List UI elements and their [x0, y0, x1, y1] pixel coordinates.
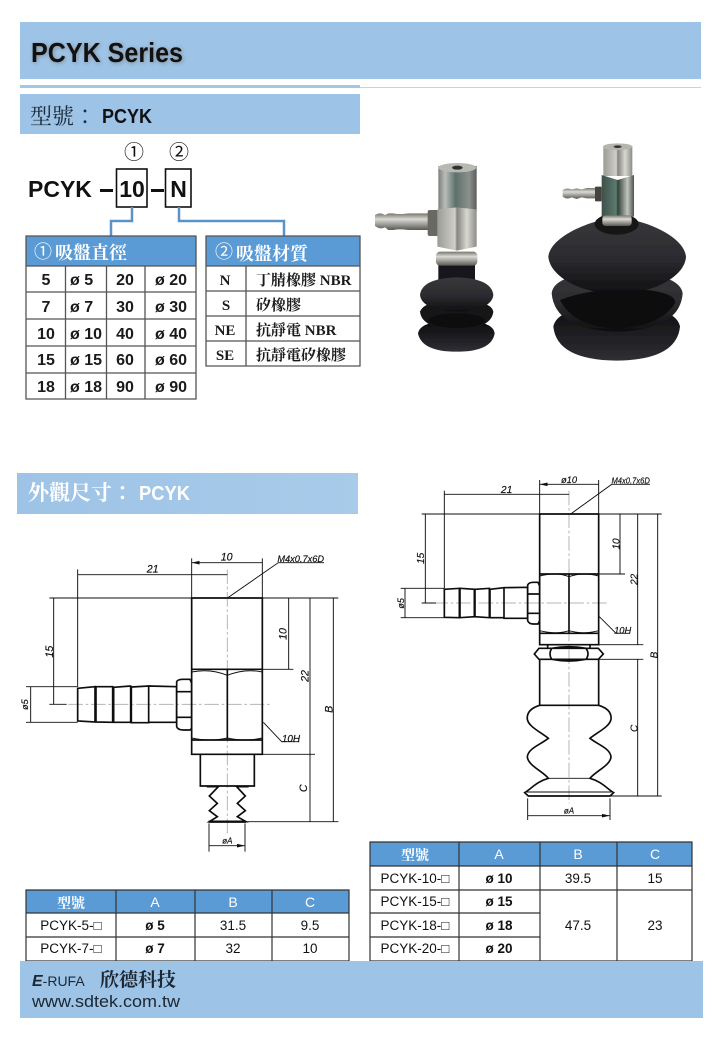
dimension labels: ø5	[20, 698, 30, 710]
dimension labels: M4x0.7x6D	[611, 476, 650, 486]
table: right dimensions: ø 10	[485, 871, 513, 886]
model code diagram	[28, 136, 284, 236]
table: right dimensions: PCYK-10-□	[381, 871, 449, 886]
technical drawing: small model PCYK-5/7	[20, 551, 338, 852]
dimension labels: M4x0.7x6D	[277, 554, 325, 564]
dimension labels: C	[630, 724, 641, 732]
table: suction cup diameter	[26, 236, 196, 399]
table: left dimensions: 9.5	[301, 918, 319, 933]
table: left dimensions: C	[305, 894, 315, 910]
table: right dimensions: 47.5	[565, 918, 591, 933]
table: cup material: S	[222, 298, 230, 314]
dimension labels: 21	[500, 485, 512, 496]
table: right dimensions: B	[573, 846, 583, 862]
table: suction cup diameter: 90	[116, 379, 134, 396]
footer banner: company: 欣德科技	[100, 969, 176, 991]
table: left dimensions: B	[228, 894, 238, 910]
table: left dimensions: 型號	[57, 895, 85, 912]
table: cup material: 丁腈橡膠 NBR	[256, 271, 352, 289]
table: cup material: NE	[215, 323, 235, 339]
table: suction cup diameter: 30	[116, 299, 134, 316]
table: left dimensions: ø 7	[145, 941, 165, 956]
table: suction cup diameter: 20	[116, 272, 134, 289]
table: suction cup diameter: ø 60	[155, 352, 187, 369]
dimension labels: 22	[299, 670, 311, 683]
table: cup material: N	[220, 273, 231, 289]
table: suction cup diameter: ø 20	[155, 272, 187, 289]
section heading: outline dimensions: PCYK	[139, 483, 191, 505]
dimension labels: 15	[44, 646, 56, 658]
table: right dimensions: 39.5	[565, 871, 591, 886]
dimension labels: 10H	[614, 625, 631, 635]
table: left dimensions: A	[150, 894, 160, 910]
table: left dimensions: 31.5	[220, 918, 246, 933]
table: suction cup diameter: ø 90	[155, 379, 187, 396]
dimension labels: 10	[611, 538, 622, 550]
table: cup material: 抗靜電矽橡膠	[256, 346, 346, 364]
dimension labels: 10H	[282, 734, 301, 745]
photo: small vacuum cup with fitting	[375, 163, 495, 352]
table: right dimensions: C	[650, 846, 660, 862]
model code diagram: PCYK	[28, 176, 92, 202]
table: right dimensions	[370, 842, 692, 961]
table: left dimensions	[26, 890, 349, 961]
section heading: model number	[20, 94, 360, 134]
table: suction cup diameter: ø 30	[155, 299, 187, 316]
table: suction cup diameter: ø 5	[70, 272, 93, 289]
table: suction cup diameter: ø 18	[70, 379, 102, 396]
dimension labels: ø10	[561, 475, 578, 485]
footer banner: company: www.sdtek.com.tw	[31, 993, 180, 1011]
table: cup material: 抗靜電 NBR	[256, 321, 337, 339]
dimension labels: ø5	[396, 597, 406, 609]
dimension labels: 21	[146, 564, 159, 576]
table: suction cup diameter: 7	[42, 299, 51, 316]
table: right dimensions: A	[494, 846, 504, 862]
table: cup material: 矽橡膠	[256, 296, 301, 314]
model code diagram: ①	[124, 136, 144, 165]
table: cup material: ②	[215, 238, 233, 264]
table: right dimensions: ø 15	[485, 894, 513, 909]
table: suction cup diameter: 吸盤直徑	[55, 243, 127, 263]
table: suction cup diameter: 40	[116, 326, 134, 343]
table: left dimensions: PCYK-5-□	[40, 918, 102, 933]
table: left dimensions: 10	[302, 941, 318, 956]
section heading: outline dimensions: 外觀尺寸：	[28, 481, 133, 505]
table: right dimensions: PCYK-20-□	[381, 941, 449, 956]
table: right dimensions: ø 20	[485, 941, 513, 956]
table: suction cup diameter: 60	[116, 352, 134, 369]
dimension labels: 10	[278, 628, 290, 640]
table: right dimensions: 15	[647, 871, 663, 886]
table: left dimensions: ø 5	[145, 918, 165, 933]
model code diagram: N	[170, 176, 187, 202]
table: suction cup diameter: 10	[37, 326, 55, 343]
title banner: PCYK Series	[20, 22, 701, 79]
table: cup material	[206, 236, 360, 366]
section heading: outline dimensions	[17, 473, 358, 514]
table: right dimensions: 型號	[401, 847, 429, 864]
dimension labels: 22	[629, 573, 640, 586]
table: suction cup diameter: ø 40	[155, 326, 187, 343]
dimension labels: 15	[416, 552, 427, 564]
dimension labels: øA	[222, 836, 232, 845]
table: left dimensions: 32	[225, 941, 241, 956]
dimension labels: B	[323, 706, 335, 713]
table: right dimensions: PCYK-18-□	[381, 918, 449, 933]
title banner: PCYK Series: PCYK Series	[31, 37, 183, 68]
footer banner: company	[20, 961, 703, 1018]
dimension labels: B	[649, 651, 660, 658]
model code diagram: 10	[119, 176, 145, 202]
section heading: model number: PCYK	[102, 106, 152, 128]
table: suction cup diameter: ø 15	[70, 352, 102, 369]
table: right dimensions: PCYK-15-□	[381, 894, 449, 909]
table: suction cup diameter: ø 10	[70, 326, 102, 343]
table: suction cup diameter: ø 7	[70, 299, 93, 316]
dimension labels	[396, 475, 660, 816]
dimension labels: C	[298, 784, 310, 792]
dimension labels: 10	[221, 551, 233, 563]
table: suction cup diameter: ①	[34, 238, 52, 264]
photo: large vacuum cup with fitting	[548, 143, 686, 361]
table: cup material: 吸盤材質	[236, 244, 310, 264]
footer banner: company: E-RUFA	[32, 973, 85, 990]
technical drawing: large model PCYK-10/15/18/20	[396, 475, 662, 820]
model code diagram: ②	[169, 136, 189, 165]
dimension labels: øA	[564, 807, 574, 816]
table: suction cup diameter: 5	[42, 272, 51, 289]
table: suction cup diameter: 15	[37, 352, 55, 369]
title banner: PCYK Series: PCYK Series	[32, 38, 184, 69]
table: right dimensions: ø 18	[485, 918, 513, 933]
table: right dimensions: 23	[647, 918, 663, 933]
table: suction cup diameter: 18	[37, 379, 55, 396]
dimension labels	[20, 551, 335, 845]
section heading: model number: 型號：	[30, 104, 96, 129]
table: left dimensions: PCYK-7-□	[40, 941, 102, 956]
table: cup material: SE	[216, 348, 234, 364]
